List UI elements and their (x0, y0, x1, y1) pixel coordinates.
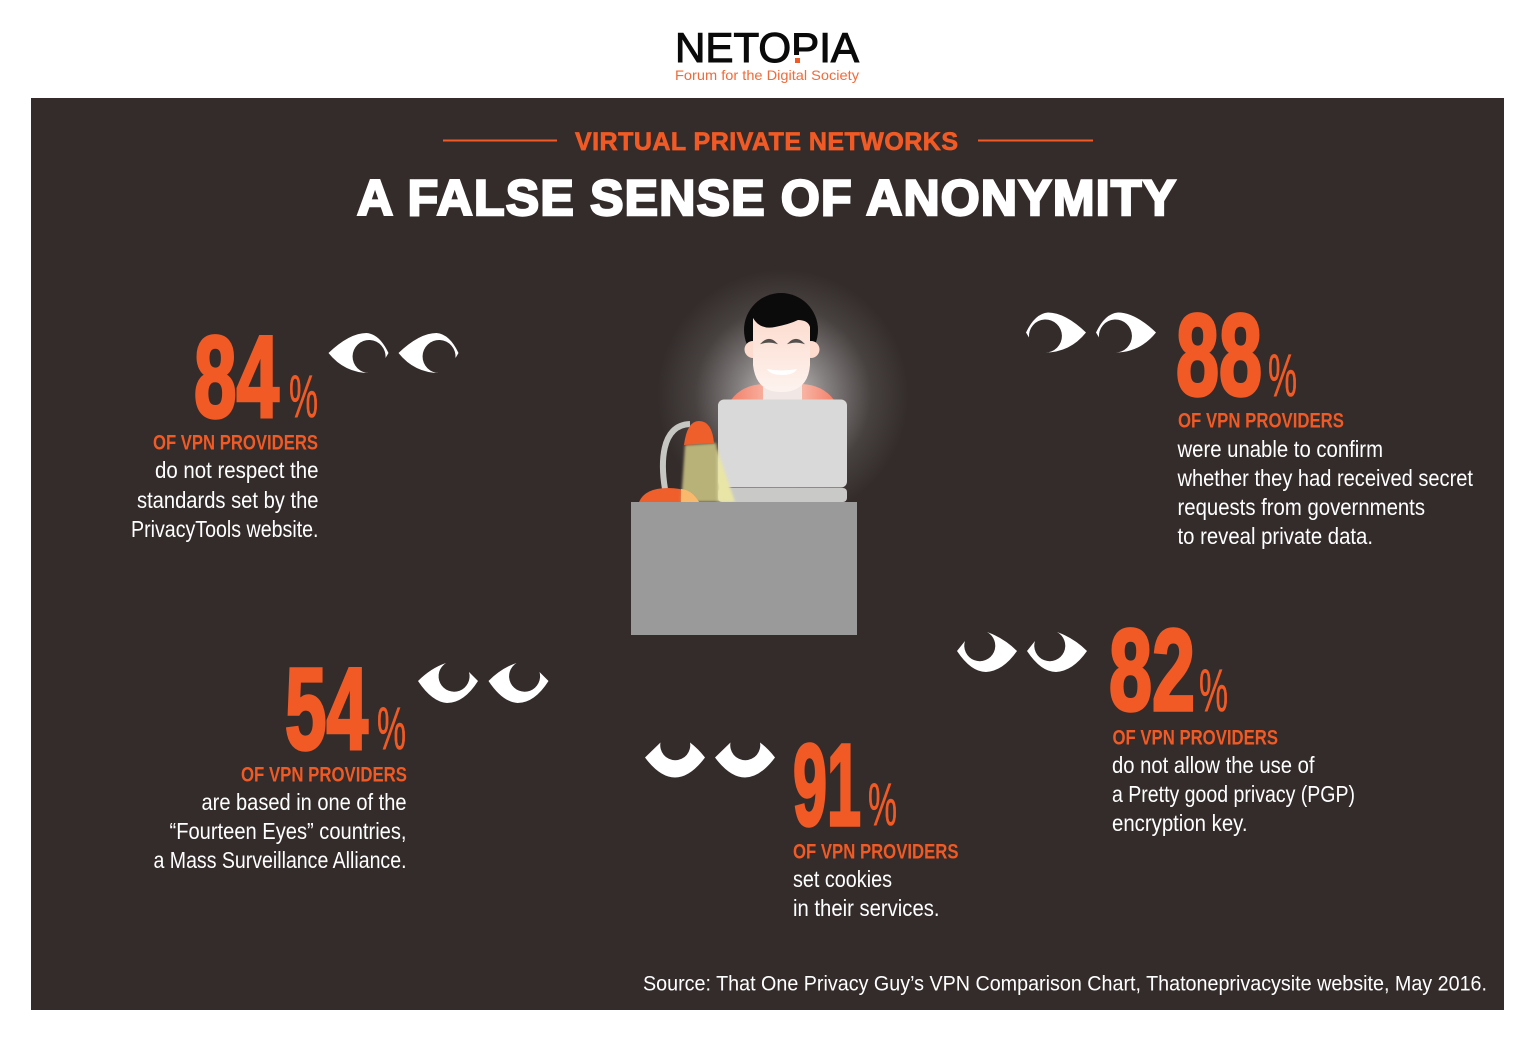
stat: 54%: a Mass Surveillance Alliance. (154, 847, 406, 873)
stat: 88%: were unable to confirm (1177, 436, 1383, 462)
stat: 84%: PrivacyTools website. (131, 516, 318, 542)
stat: 82%: do not allow the use of (1112, 752, 1315, 778)
illustration: person at laptop (639, 265, 920, 502)
stat: 84%: do not respect the (155, 457, 318, 483)
stat: 54%: 54 (285, 644, 368, 774)
icon: eyes looking up (645, 742, 775, 778)
stat: 91%: in their services. (793, 895, 940, 921)
stat: 91%: 91 (793, 720, 861, 850)
icon: eyes looking up right (418, 663, 548, 703)
stat: 82% (957, 605, 1355, 836)
title: A FALSE SENSE OF ANONYMITY (357, 170, 1176, 226)
stat: 54%: OF VPN PROVIDERS (241, 762, 407, 786)
stat: 84%: % (289, 363, 318, 430)
desk (631, 502, 857, 635)
stat: 54%: % (377, 695, 406, 762)
stat: 82%: % (1199, 657, 1228, 724)
stat: 54%: “Fourteen Eyes” countries, (170, 818, 406, 844)
stat: 91%: OF VPN PROVIDERS (793, 840, 958, 864)
laptop (718, 400, 847, 502)
stat: 88% (1026, 290, 1474, 549)
stat: 84% (131, 312, 458, 542)
logo: Netopia: Forum for the Digital Society (675, 67, 859, 83)
stat: 88%: whether they had received secret (1177, 465, 1474, 491)
stat: 54% (154, 644, 548, 873)
stat: 82%: OF VPN PROVIDERS (1112, 726, 1278, 750)
stat: 54%: are based in one of the (202, 789, 406, 815)
stat: 84%: OF VPN PROVIDERS (153, 430, 318, 454)
stat: 88%: OF VPN PROVIDERS (1178, 408, 1344, 432)
icon: eyes looking up left (957, 632, 1087, 672)
stat: 84%: standards set by the (137, 487, 318, 513)
source note: Source: That One Privacy Guy’s VPN Comparison Chart, Thatoneprivacysite website, May 2016. (643, 972, 1487, 996)
stat: 88%: % (1268, 342, 1297, 409)
stat: 91% (645, 720, 958, 921)
desk lamp (639, 421, 735, 502)
person (731, 293, 834, 400)
stat: 88%: to reveal private data. (1178, 523, 1373, 549)
stat: 88%: 88 (1176, 290, 1262, 420)
logo: Netopia: NETOPIA (675, 24, 859, 71)
screen glow (650, 265, 920, 502)
icon: eyes looking left (1026, 312, 1156, 353)
kicker heading: VIRTUAL PRIVATE NETWORKS (575, 128, 958, 156)
stat: 84%: 84 (194, 312, 279, 442)
icon: eyes looking right (328, 333, 458, 373)
stat: 88%: requests from governments (1178, 494, 1425, 520)
stat: 91%: % (868, 771, 897, 838)
stat: 82%: encryption key. (1112, 810, 1248, 836)
stat: 91%: set cookies (793, 866, 892, 892)
stat: 82%: 82 (1109, 605, 1195, 735)
stat: 82%: a Pretty good privacy (PGP) (1112, 781, 1355, 807)
